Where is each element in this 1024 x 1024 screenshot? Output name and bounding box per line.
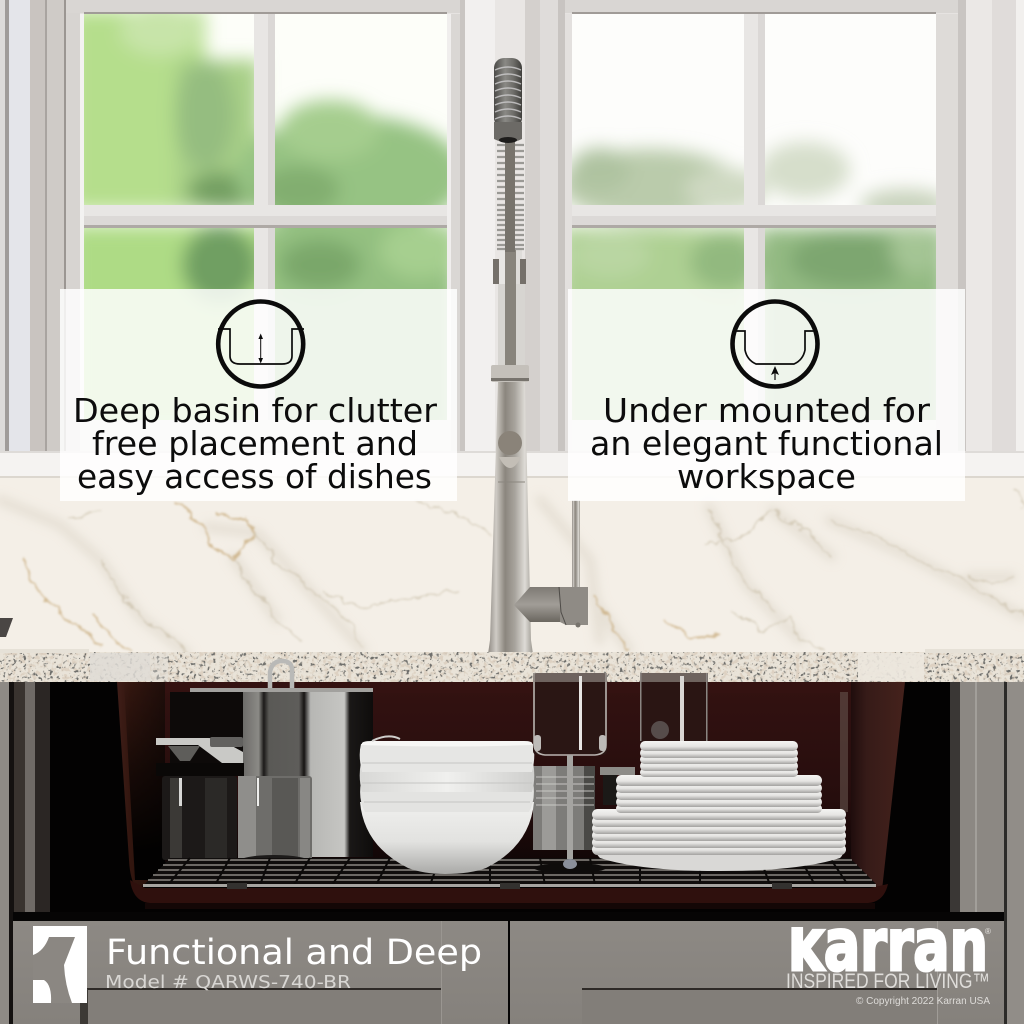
text: under mounted caption: [590, 391, 943, 496]
drinking glasses: [162, 776, 312, 869]
dish rack: [143, 858, 876, 889]
tagline: INSPIRED FOR LIVING™: [786, 970, 990, 993]
grey glass: [238, 776, 312, 869]
pot handle: [270, 661, 292, 689]
text: under mounted caption: an elegant functional: [590, 424, 943, 463]
plate stacks: [592, 741, 846, 871]
spray head: [494, 58, 522, 143]
window sill: [0, 451, 1024, 478]
side handle: [514, 587, 588, 628]
spring: [497, 145, 524, 249]
lever button: [498, 431, 522, 468]
small dark object at left edge: [0, 618, 13, 637]
dark glass: [162, 776, 237, 860]
back wall: [165, 682, 851, 862]
panel: deep basin: [60, 289, 457, 501]
icon: under mount: [732, 302, 818, 386]
logo: karran: ®: [985, 927, 991, 936]
text: deep basin caption: [73, 391, 437, 496]
tall glass behind plates: [640, 673, 708, 743]
large plates: [597, 852, 843, 871]
faucet: [488, 58, 588, 654]
brand mark: K block: [33, 926, 87, 1003]
basin floor and lip: [130, 880, 888, 903]
countertop: [0, 649, 1024, 682]
ring: [491, 365, 529, 382]
base cabinet sides: [0, 682, 1024, 1024]
text: under mounted caption: Under mounted for: [603, 391, 930, 430]
left door: [13, 921, 508, 1024]
right wall: [850, 682, 905, 890]
left saucepan: [156, 737, 244, 776]
faucet body: [488, 382, 533, 654]
collar clips: [493, 259, 526, 284]
text: under mounted caption: workspace: [677, 457, 856, 496]
window mullions: [80, 14, 958, 452]
logo: karran: [791, 927, 991, 972]
text: deep basin caption: easy access of dishes: [77, 457, 432, 496]
medium plates: [616, 804, 822, 813]
upper tube: [498, 284, 525, 366]
small plates: [640, 768, 798, 777]
left window glass with trees: [84, 14, 447, 420]
cabinet doors: [13, 912, 1004, 1024]
right window glass with trees: [572, 14, 936, 420]
panel: under mounted: [568, 289, 965, 501]
pot body: [243, 692, 373, 857]
title: functional and deep: Functional and Deep: [106, 933, 482, 973]
window wall background: [0, 0, 1024, 480]
icon: deep basin depth: [218, 302, 304, 386]
sink basin: [117, 682, 905, 909]
model number: Model # QARWS-740-BR: [105, 972, 351, 993]
marble backsplash: [0, 478, 1024, 653]
pot lid: [190, 688, 373, 692]
stacked bowls: [360, 736, 534, 874]
stock pot: [170, 661, 373, 857]
right door: [510, 921, 1004, 1024]
text: deep basin caption: free placement and: [92, 424, 418, 463]
left wall: [117, 682, 170, 890]
thin rod: [572, 500, 580, 590]
wine glass: [533, 673, 607, 873]
copyright: © Copyright 2022 Karran USA: [856, 996, 990, 1007]
back can: [533, 766, 635, 850]
text: deep basin caption: Deep basin for clutter: [73, 391, 437, 430]
